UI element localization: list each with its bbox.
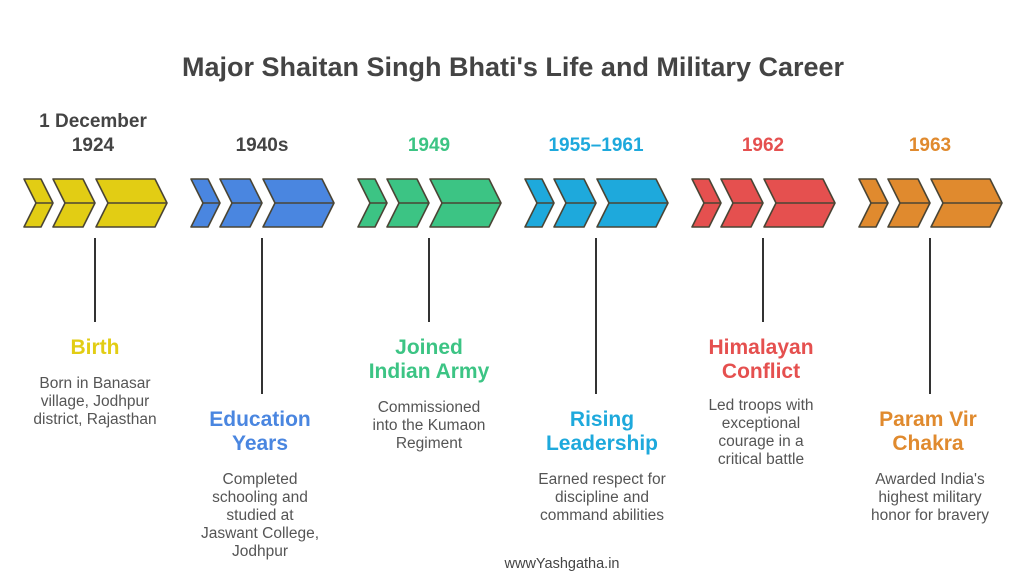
- stage 1: birth: [24, 111, 167, 428]
- stage 2: education: studied at: [226, 507, 294, 524]
- stage 5: conflict: 1962: [742, 135, 784, 156]
- stage 5: conflict: critical battle: [718, 451, 804, 468]
- stage 2: education: Jaswant College,: [201, 525, 319, 542]
- stage 3: army: Regiment: [396, 435, 463, 452]
- stage 5: conflict: Himalayan: [708, 336, 814, 359]
- stage 2: education: Jodhpur: [232, 543, 288, 560]
- stage 5: conflict: Conflict: [722, 360, 800, 383]
- stage 1: birth: 1924: [72, 135, 115, 156]
- stage 2: education: 1940s: [236, 135, 288, 156]
- stage 6: PVC: highest military: [878, 489, 982, 506]
- stage 2: education: Completed: [223, 471, 297, 488]
- stage 6: PVC: Param Vir: [879, 408, 977, 431]
- stage 3: army: 1949: [408, 135, 450, 156]
- stage 5: conflict: [692, 135, 835, 468]
- stage 4: leadership: Earned respect for: [538, 471, 666, 488]
- title: Major Shaitan Singh Bhati's Life and Military Career: [182, 52, 845, 82]
- stage 6: PVC: honor for bravery: [871, 507, 989, 524]
- footer: wwwYashgatha.in: [504, 556, 620, 572]
- stage 6: PVC: Chakra: [892, 432, 964, 455]
- stage 4: leadership: [525, 135, 668, 524]
- stage 2: education: [191, 135, 334, 560]
- stage 1: birth: village, Jodhpur: [41, 393, 149, 410]
- stage 2: education: schooling and: [212, 489, 308, 506]
- stage 5: conflict: exceptional: [722, 415, 800, 432]
- stage 4: leadership: discipline and: [555, 489, 649, 506]
- stage 2: education: Years: [232, 432, 288, 455]
- stage 6: PVC: Awarded India's: [875, 471, 985, 488]
- stage 2: education: Education: [209, 408, 311, 431]
- stage 1: birth: district, Rajasthan: [33, 411, 157, 428]
- stage 3: army: [358, 135, 501, 452]
- stage 4: leadership: Leadership: [546, 432, 658, 455]
- stage 1: birth: Birth: [70, 336, 120, 359]
- stage 1: birth: 1 December: [39, 111, 147, 132]
- stage 3: army: Indian Army: [369, 360, 490, 383]
- stage 5: conflict: Led troops with: [708, 397, 814, 414]
- stage 1: birth: Born in Banasar: [39, 375, 151, 392]
- stage 3: army: Commissioned: [378, 399, 480, 416]
- stage 5: conflict: courage in a: [718, 433, 804, 450]
- stage 6: PVC: 1963: [909, 135, 951, 156]
- stage 3: army: into the Kumaon: [373, 417, 485, 434]
- stage 3: army: Joined: [395, 336, 463, 359]
- stage 4: leadership: Rising: [570, 408, 634, 431]
- stage 4: leadership: 1955–1961: [548, 135, 644, 156]
- stage 6: PVC: [859, 135, 1002, 524]
- stage 4: leadership: command abilities: [540, 507, 664, 524]
